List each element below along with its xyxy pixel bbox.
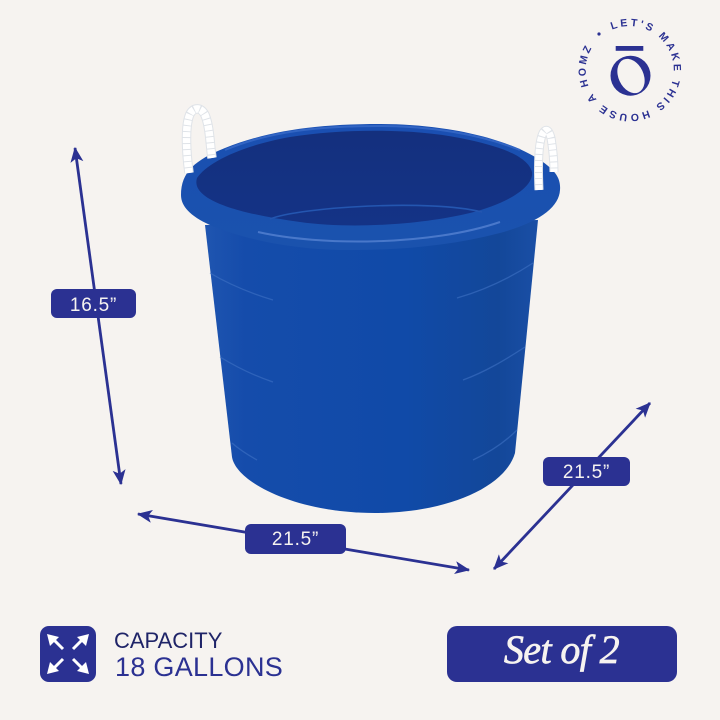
tub body: [205, 220, 538, 513]
set of 2 badge: [447, 626, 677, 682]
capacity text: [114, 628, 283, 682]
height label: 16.5”: [70, 295, 117, 316]
right rope handle: [538, 130, 554, 190]
product image: blue tub with rope handles: [181, 109, 560, 513]
height label: [51, 289, 136, 318]
set of 2 badge: Set of 2: [504, 627, 620, 672]
logo circular text: LET'S MAKE THIS HOUSE A HOMZ: [578, 18, 682, 122]
logo mark: [610, 46, 650, 98]
tub inner: [196, 131, 532, 225]
width label: [245, 524, 346, 554]
capacity text: CAPACITY: [114, 628, 223, 653]
width arrow: [138, 514, 469, 570]
logo circular path: [586, 26, 674, 114]
height arrow: [51, 148, 136, 484]
left rope handle: [186, 109, 212, 173]
capacity icon: [40, 626, 96, 682]
tub rim: [181, 124, 560, 250]
depth label: 21.5”: [563, 462, 610, 483]
tub body ribs: [210, 263, 533, 460]
width label: 21.5”: [272, 529, 319, 550]
tub inner base curve: [270, 205, 482, 219]
rim highlight: [258, 222, 500, 241]
depth arrow: [494, 403, 650, 569]
capacity text: 18 GALLONS: [115, 652, 283, 682]
depth label: [543, 457, 630, 486]
logo badge: [578, 18, 682, 122]
logo dot: [597, 32, 601, 36]
